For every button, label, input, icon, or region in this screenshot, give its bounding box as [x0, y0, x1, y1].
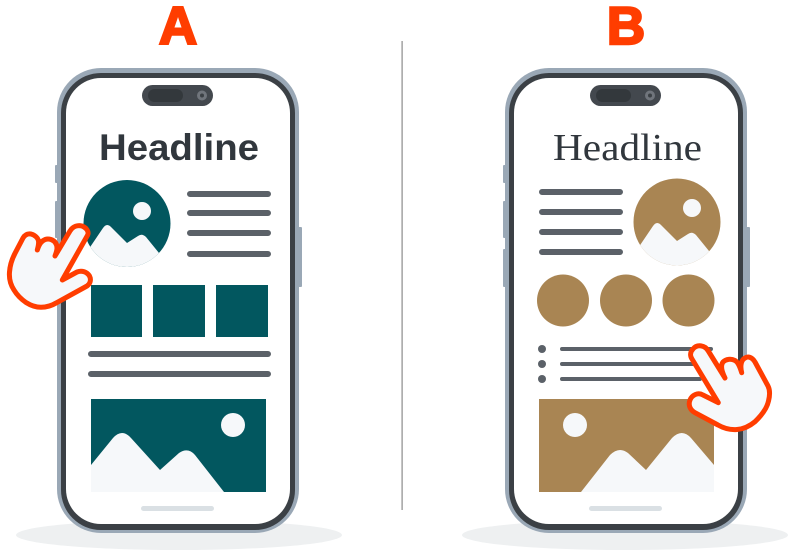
icon: pointing hand A: [9, 226, 90, 307]
headline A: Headline: [99, 127, 259, 168]
headline B: Headline: [553, 127, 702, 169]
round image B: [634, 178, 720, 266]
text lines A: [190, 194, 268, 254]
home bar A: [141, 506, 214, 511]
phone body A: [57, 68, 299, 533]
icon: pointing hand B: [689, 346, 770, 430]
brown circles: [537, 274, 714, 326]
round image A: [84, 180, 170, 267]
side buttons B: [503, 165, 750, 287]
camera notch A: [142, 85, 213, 106]
landscape image B: [539, 399, 714, 492]
text lines B: [542, 192, 620, 252]
ground shadow B: [462, 520, 788, 550]
landscape image A: [91, 399, 266, 492]
bullet list B: [538, 345, 711, 383]
wide text lines A: [91, 354, 268, 374]
phone body B: [505, 68, 747, 533]
side buttons A: [55, 165, 302, 287]
home bar B: [589, 506, 662, 511]
camera notch B: [590, 85, 661, 106]
teal squares: [91, 285, 268, 337]
divider between variants: [402, 41, 403, 510]
phone B: [462, 68, 788, 550]
phone A: [16, 68, 342, 550]
ground shadow A: [16, 520, 342, 550]
